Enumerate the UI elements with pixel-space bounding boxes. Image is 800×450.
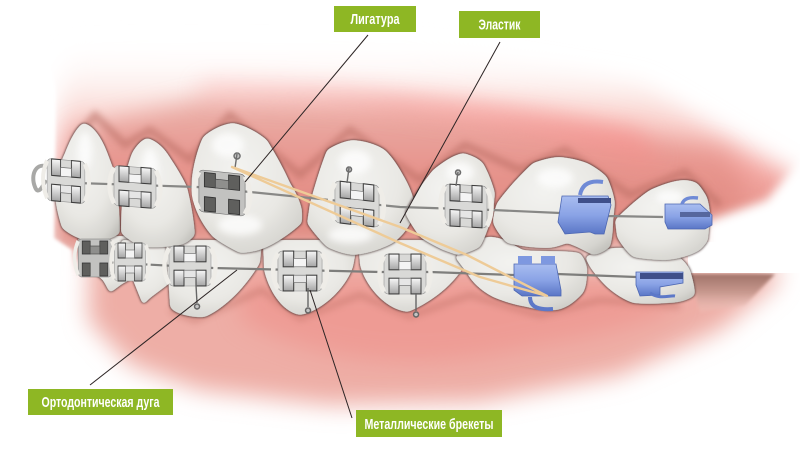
white gap behind the right of the mouth [688, 150, 800, 273]
lower teeth [78, 236, 695, 317]
label: Лигатура: Лигатура [350, 11, 400, 28]
label: Ортодонтическая дуга: Ортодонтическая дуга [42, 394, 160, 411]
archwire upper [77, 183, 663, 217]
tooth highlights [78, 132, 684, 243]
pointer: Эластик [400, 42, 500, 223]
upper metal brackets [33, 153, 492, 228]
lower gum [88, 240, 780, 405]
label: Ортодонтическая дуга [28, 389, 173, 415]
upper teeth [55, 123, 710, 260]
label: Металлические брекеты: Металлические брекеты [364, 416, 494, 433]
pointer: Металлические брекеты [310, 290, 352, 418]
lower metal brackets [75, 239, 430, 317]
label: Эластик [459, 11, 540, 38]
archwire lower [100, 262, 637, 277]
pointer: Ортодонтическая дуга [90, 270, 237, 385]
blue brackets [514, 182, 712, 309]
pointer: Лигатура [245, 35, 368, 182]
elastic [232, 167, 547, 296]
upper gum [0, 20, 800, 300]
label: Лигатура [334, 6, 416, 32]
label: Эластик: Эластик [478, 16, 521, 34]
label: Металлические брекеты [356, 410, 502, 437]
